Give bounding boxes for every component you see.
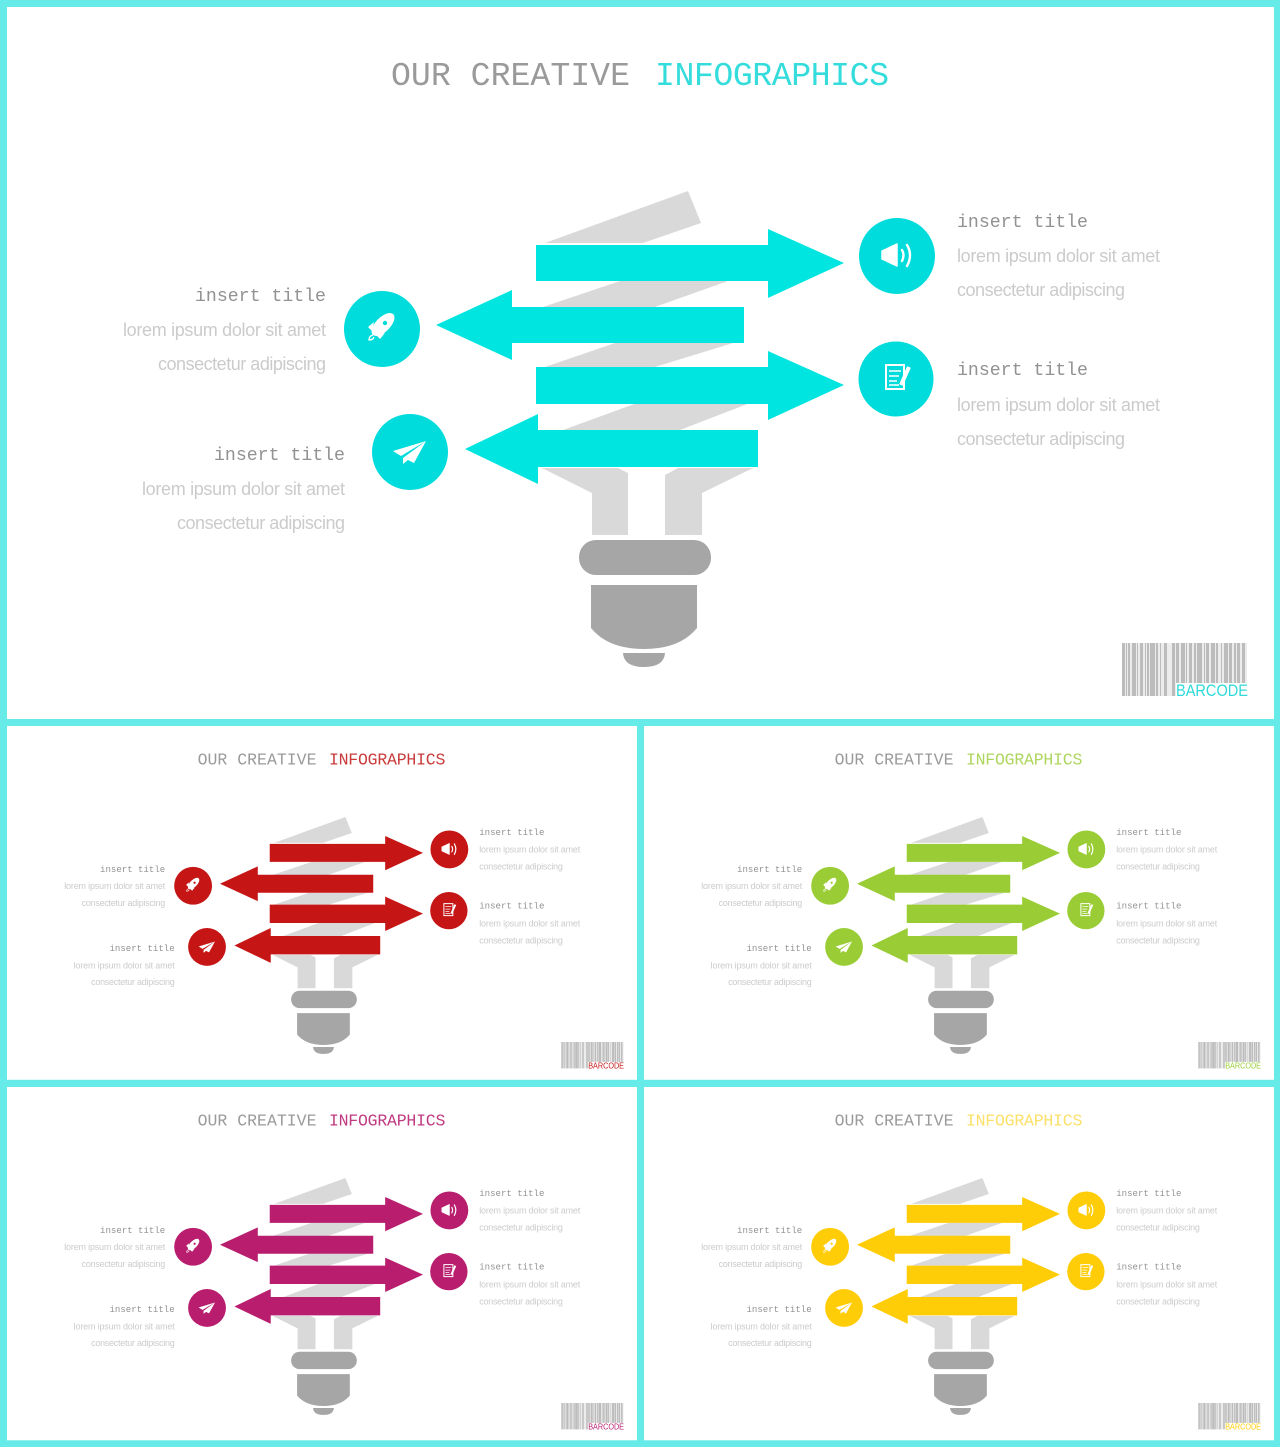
text block: lower right: insert title	[479, 1262, 544, 1273]
text block: bottom left	[142, 446, 345, 533]
panel: main cyan infographic	[7, 7, 1274, 719]
text block: bottom left: consectetur adipiscing	[728, 977, 812, 987]
barcode	[1198, 1042, 1261, 1070]
text block: upper left	[701, 864, 803, 908]
text block: lower right: lorem ipsum dolor sit amet	[479, 919, 581, 929]
text block: upper left: insert title	[737, 864, 802, 875]
text block: bottom left: consectetur adipiscing	[91, 977, 175, 987]
text block: upper left: insert title	[100, 864, 165, 875]
icon: rocket	[344, 291, 420, 367]
text block: bottom left: consectetur adipiscing	[177, 513, 345, 533]
arrow: upper left	[436, 290, 744, 360]
title: INFOGRAPHICS	[966, 750, 1082, 769]
text block: top right: insert title	[479, 827, 544, 838]
text block: upper left: consectetur adipiscing	[719, 1259, 802, 1269]
icon: rocket	[811, 1228, 849, 1266]
text block: top right	[479, 1188, 581, 1232]
text block: bottom left: insert title	[110, 943, 175, 954]
light bulb	[272, 817, 378, 1054]
text block: bottom left: lorem ipsum dolor sit amet	[711, 1321, 812, 1331]
arrow: lower right	[907, 897, 1060, 931]
text block: bottom left	[711, 1304, 812, 1348]
icon: rocket	[811, 867, 849, 905]
arrow: bottom left	[871, 928, 1017, 963]
icon: document with pen	[858, 342, 934, 416]
text block: lower right	[1116, 1262, 1218, 1306]
barcode: BARCODE	[1225, 1060, 1261, 1070]
panel: red infographic	[7, 726, 637, 1080]
icon: rocket	[174, 1228, 212, 1266]
barcode	[1122, 643, 1248, 700]
text block: upper left: lorem ipsum dolor sit amet	[701, 1242, 803, 1252]
barcode: BARCODE	[588, 1060, 624, 1070]
title: INFOGRAPHICS	[655, 57, 889, 95]
title: OUR CREATIVE	[391, 57, 630, 95]
barcode	[561, 1403, 624, 1431]
light bulb	[909, 817, 1015, 1054]
text block: top right: insert title	[1116, 1188, 1181, 1199]
text block: bottom left	[74, 943, 175, 987]
text block: lower right: consectetur adipiscing	[1116, 935, 1200, 945]
text block: upper left	[64, 864, 166, 908]
icon: document with pen	[1067, 1253, 1105, 1290]
title: INFOGRAPHICS	[329, 750, 445, 769]
barcode: BARCODE	[1225, 1421, 1261, 1431]
title: INFOGRAPHICS	[966, 1111, 1082, 1130]
text block: top right: consectetur adipiscing	[1116, 861, 1200, 871]
text block: lower right: insert title	[1116, 901, 1181, 912]
text block: upper left	[701, 1225, 803, 1269]
title: OUR CREATIVE	[198, 1111, 317, 1130]
text block: bottom left: lorem ipsum dolor sit amet	[74, 1321, 175, 1331]
light bulb	[540, 191, 753, 667]
text block: upper left: consectetur adipiscing	[82, 1259, 165, 1269]
text block: upper left: insert title	[737, 1225, 802, 1236]
title: OUR CREATIVE	[835, 1111, 954, 1130]
panel: yellow infographic	[644, 1087, 1274, 1440]
arrow: upper left	[857, 1227, 1010, 1262]
arrow: top right	[907, 1197, 1060, 1231]
text block: top right	[1116, 1188, 1218, 1232]
icon: paper plane	[372, 414, 448, 490]
arrow: lower right	[536, 351, 844, 420]
text block: top right: lorem ipsum dolor sit amet	[479, 1205, 581, 1215]
icon: document with pen	[1067, 892, 1105, 929]
text block: upper left: lorem ipsum dolor sit amet	[701, 881, 803, 891]
text block: bottom left	[711, 943, 812, 987]
arrow: top right	[907, 836, 1060, 870]
text block: bottom left: consectetur adipiscing	[91, 1338, 175, 1348]
text block: top right	[957, 213, 1160, 300]
panel: green infographic	[644, 726, 1274, 1080]
arrow: top right	[536, 229, 844, 298]
text block: bottom left: consectetur adipiscing	[728, 1338, 812, 1348]
text block: lower right: consectetur adipiscing	[479, 935, 563, 945]
text block: bottom left: insert title	[214, 446, 345, 466]
text block: top right: lorem ipsum dolor sit amet	[957, 246, 1160, 266]
text block: top right: lorem ipsum dolor sit amet	[1116, 844, 1218, 854]
text block: top right: consectetur adipiscing	[957, 280, 1125, 300]
arrow: upper left	[220, 866, 373, 901]
text block: top right: lorem ipsum dolor sit amet	[479, 844, 581, 854]
icon: document with pen	[430, 1253, 468, 1290]
icon: paper plane	[188, 928, 226, 966]
icon: rocket	[174, 867, 212, 905]
text block: bottom left: lorem ipsum dolor sit amet	[711, 960, 812, 970]
icon: speaker	[1067, 830, 1105, 868]
text block: lower right: lorem ipsum dolor sit amet	[957, 395, 1160, 415]
icon: document with pen	[430, 892, 468, 929]
barcode	[561, 1042, 624, 1070]
arrow: bottom left	[234, 928, 380, 963]
text block: upper left: lorem ipsum dolor sit amet	[64, 881, 166, 891]
icon: speaker	[430, 830, 468, 868]
text block: upper left	[123, 287, 326, 374]
arrow: bottom left	[465, 414, 758, 484]
text block: lower right	[479, 1262, 581, 1306]
text block: lower right: lorem ipsum dolor sit amet	[479, 1280, 581, 1290]
title: INFOGRAPHICS	[329, 1111, 445, 1130]
arrow: upper left	[220, 1227, 373, 1262]
arrow: lower right	[270, 1258, 423, 1292]
text block: lower right: lorem ipsum dolor sit amet	[1116, 1280, 1218, 1290]
text block: bottom left: insert title	[747, 1304, 812, 1315]
arrow: bottom left	[234, 1289, 380, 1324]
icon: paper plane	[188, 1289, 226, 1327]
text block: upper left: consectetur adipiscing	[158, 354, 326, 374]
text block: lower right	[957, 361, 1160, 449]
text block: upper left: consectetur adipiscing	[82, 898, 165, 908]
text block: top right: consectetur adipiscing	[479, 1222, 563, 1232]
icon: speaker	[1067, 1191, 1105, 1229]
text block: bottom left: lorem ipsum dolor sit amet	[142, 479, 345, 499]
text block: upper left: consectetur adipiscing	[719, 898, 802, 908]
text block: upper left: lorem ipsum dolor sit amet	[64, 1242, 166, 1252]
text block: lower right: consectetur adipiscing	[1116, 1296, 1200, 1306]
barcode: BARCODE	[588, 1421, 624, 1431]
text block: top right	[1116, 827, 1218, 871]
panel: magenta infographic	[7, 1087, 637, 1440]
text block: lower right: insert title	[957, 361, 1088, 381]
arrow: lower right	[270, 897, 423, 931]
title: OUR CREATIVE	[835, 750, 954, 769]
text block: bottom left: lorem ipsum dolor sit amet	[74, 960, 175, 970]
text block: top right: insert title	[957, 213, 1088, 233]
arrow: bottom left	[871, 1289, 1017, 1324]
title: OUR CREATIVE	[198, 750, 317, 769]
text block: upper left: insert title	[195, 287, 326, 307]
text block: lower right: consectetur adipiscing	[479, 1296, 563, 1306]
icon: paper plane	[825, 928, 863, 966]
text block: top right	[479, 827, 581, 871]
text block: lower right: insert title	[479, 901, 544, 912]
icon: speaker	[859, 218, 935, 294]
light bulb	[909, 1178, 1015, 1415]
text block: upper left	[64, 1225, 166, 1269]
text block: top right: consectetur adipiscing	[479, 861, 563, 871]
light bulb	[272, 1178, 378, 1415]
text block: lower right	[1116, 901, 1218, 945]
text block: bottom left: insert title	[110, 1304, 175, 1315]
text block: upper left: lorem ipsum dolor sit amet	[123, 320, 326, 340]
arrow: top right	[270, 1197, 423, 1231]
text block: lower right	[479, 901, 581, 945]
barcode	[1198, 1403, 1261, 1431]
text block: bottom left	[74, 1304, 175, 1348]
icon: paper plane	[825, 1289, 863, 1327]
text block: top right: insert title	[1116, 827, 1181, 838]
barcode: BARCODE	[1176, 681, 1248, 700]
text block: top right: lorem ipsum dolor sit amet	[1116, 1205, 1218, 1215]
arrow: lower right	[907, 1258, 1060, 1292]
text block: upper left: insert title	[100, 1225, 165, 1236]
arrow: top right	[270, 836, 423, 870]
text block: lower right: lorem ipsum dolor sit amet	[1116, 919, 1218, 929]
text block: top right: consectetur adipiscing	[1116, 1222, 1200, 1232]
text block: top right: insert title	[479, 1188, 544, 1199]
text block: lower right: insert title	[1116, 1262, 1181, 1273]
text block: bottom left: insert title	[747, 943, 812, 954]
text block: lower right: consectetur adipiscing	[957, 429, 1125, 449]
icon: speaker	[430, 1191, 468, 1229]
arrow: upper left	[857, 866, 1010, 901]
